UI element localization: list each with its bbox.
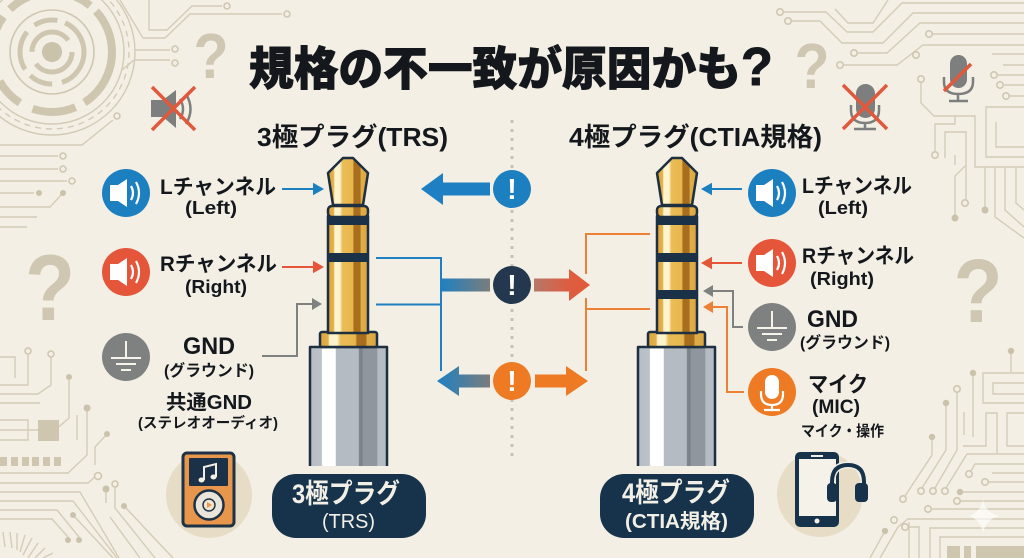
warning 2: arrows and badge [440,266,590,304]
panel: 3-pole label pill: 3極プラグ [292,478,400,509]
arrow: L right [703,184,742,194]
decorative circuit pattern: bottom left [0,348,173,558]
icon: left speaker R [102,248,150,296]
label: L channel right: Lチャンネル [802,175,912,198]
icon: microphone [748,368,796,416]
label: R channel left: Rチャンネル [160,253,277,276]
warning 3: arrows and badge: ! [507,366,517,398]
warning 1: arrow and badge: ! [507,174,517,206]
icon: left speaker L [102,169,150,217]
title: 規格の不一致が原因かも? [249,37,773,97]
arrow: R right [703,258,742,268]
arrow: L left [282,184,322,194]
icon: right ground [748,303,796,351]
centre dotted divider [510,120,514,462]
label: GND left: (グラウンド) [164,361,254,380]
icon: slashed microphone [944,55,973,101]
label: L channel right: (Left) [818,198,868,218]
arrow: MIC right [703,301,744,392]
warning 2: arrows and badge: ! [507,270,517,302]
icon: music player [166,452,252,538]
label: L channel left: (Left) [185,198,237,218]
label: GND left: 共通GND [166,391,252,414]
label: GND left: GND [183,333,235,360]
icon: phone with headphones [777,451,868,537]
decorative circuit pattern: bottom right [870,348,1024,558]
icon: crossed microphone [843,84,887,129]
panel: 4-pole plug illustration [638,158,715,466]
label: GND right [800,306,890,352]
panel: 3-pole label pill [272,474,426,538]
panel: 4-pole label pill: (CTIA規格) [625,510,728,533]
label: GND left [138,333,278,432]
label: L channel right [802,175,912,218]
label: R channel right [802,245,914,289]
decorative question mark: top right: ? [794,30,830,102]
icon: right speaker L [748,169,796,217]
panel: 3-pole plug illustration [310,158,387,466]
decorative circuit pattern: top left [0,0,290,227]
arrow: GND right [703,285,743,327]
label: R channel right: (Right) [810,269,874,289]
icon: muted speaker [151,87,195,130]
panel: 4-pole label pill: 4極プラグ [622,477,730,508]
label: R channel right: Rチャンネル [802,245,914,268]
decorative question mark: right: ? [954,242,1002,342]
label: MIC right: マイク・操作 [801,422,884,440]
label: R channel left [160,253,277,297]
panel: 3-pole label pill: (TRS) [322,511,375,533]
panel: 4-pole label pill [600,474,754,538]
icon: left ground [102,333,150,381]
label: MIC right [801,372,884,440]
heading: 3-pole plug: 3極プラグ(TRS) [257,122,448,152]
warning 3: arrows and badge [437,362,588,400]
decorative question mark: top left: ? [194,20,228,92]
label: L channel left [160,176,276,218]
label: MIC right: (MIC) [812,397,860,418]
sparkle [968,500,999,533]
label: GND right: (グラウンド) [800,333,890,352]
lines: right tip connections [586,234,650,371]
label: MIC right: マイク [808,372,868,397]
label: GND right: GND [807,306,858,333]
decorative question mark: left: ? [25,235,75,340]
label: GND left: (ステレオオーディオ) [138,414,278,432]
decorative circuit pattern: top right [777,0,1024,238]
label: R channel left: (Right) [185,277,247,297]
warning 1: arrow and badge [421,170,531,208]
heading: 4-pole plug: 4極プラグ(CTIA規格) [569,122,822,152]
icon: right speaker R [748,239,796,287]
arrow: R left [282,262,322,272]
lines: left tip connections [376,258,441,371]
arrow: GND left [262,298,322,356]
label: L channel left: Lチャンネル [160,176,276,199]
